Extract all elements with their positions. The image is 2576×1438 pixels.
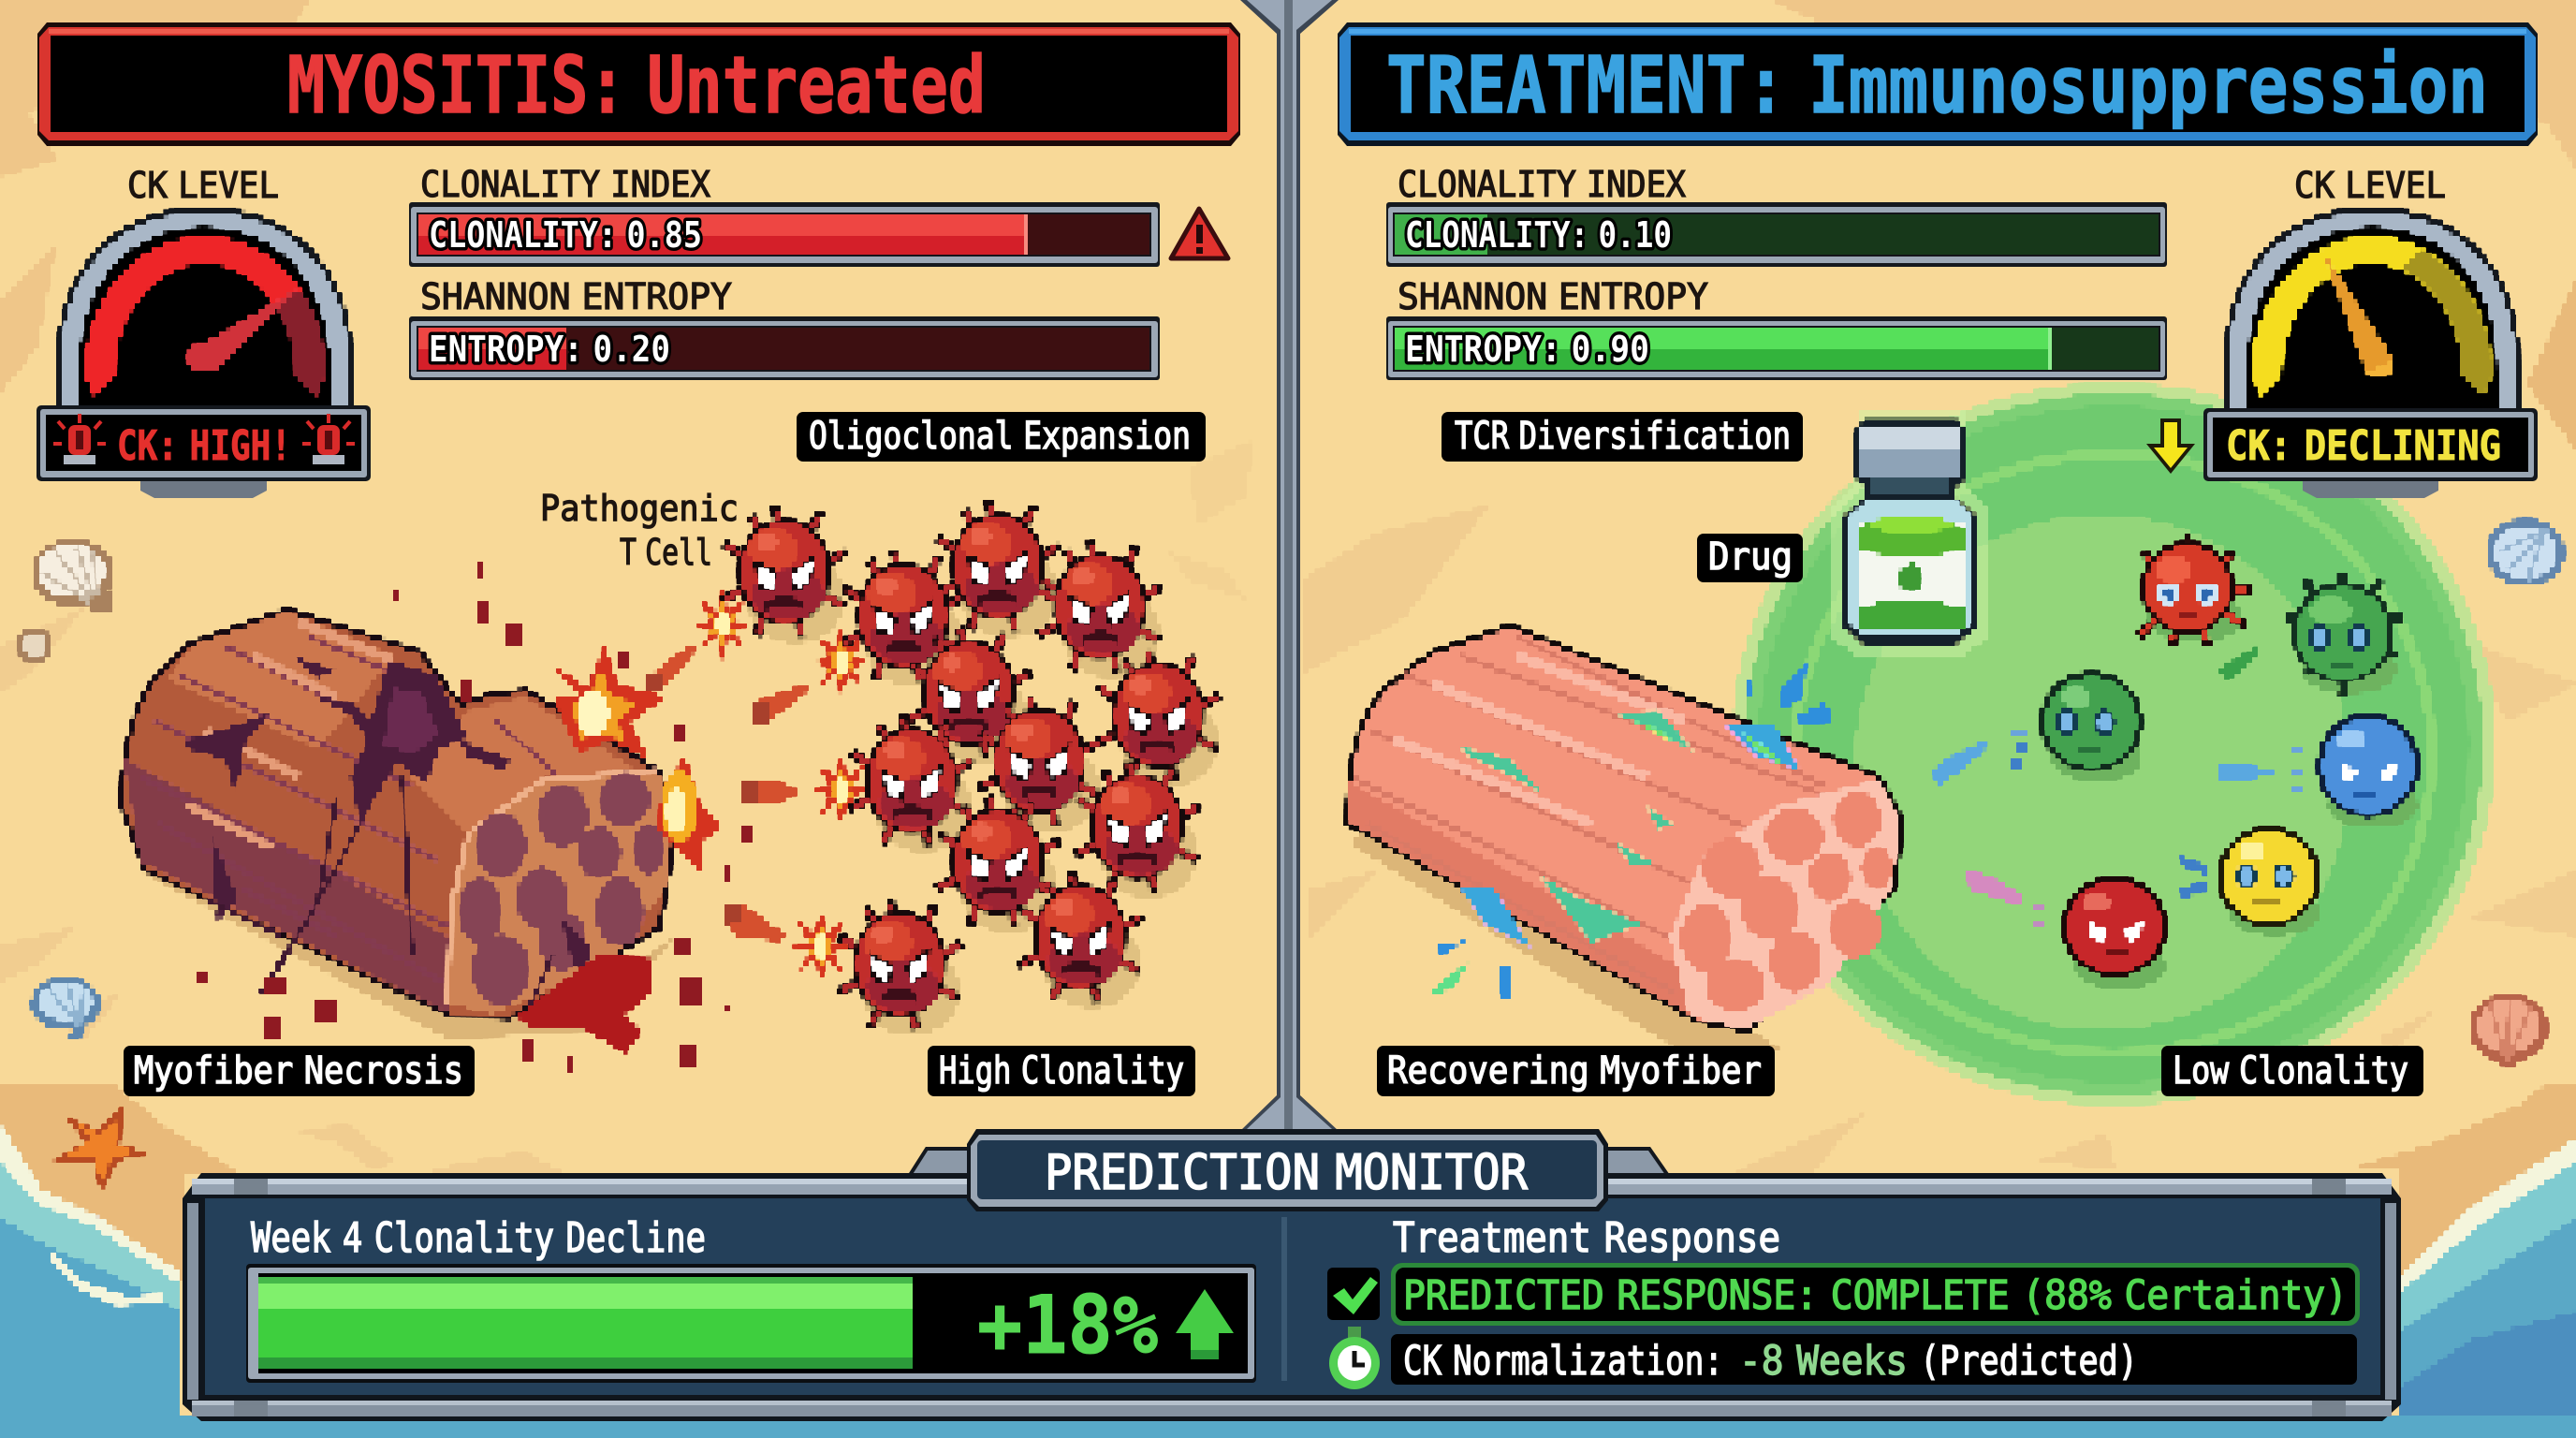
bar: clonality 0.85: CLONALITY: 0.85 (429, 214, 702, 256)
healing zone: green field (1732, 383, 2496, 1106)
diverse T cells and comets (1930, 534, 2420, 989)
icon: warning triangle (1171, 209, 1228, 258)
T cell: red spiky (2139, 534, 2251, 646)
icon: small pebble shell (17, 627, 52, 663)
icon: white shell top left (32, 539, 114, 612)
T cell 5 (1096, 650, 1220, 786)
shannon entropy heading: SHANNON ENTROPY (1398, 276, 1708, 317)
bar: entropy 0.90 (1386, 316, 2167, 380)
CK normalization row: -8 Weeks (1739, 1338, 1908, 1385)
clonality index heading: CLONALITY INDEX (1398, 164, 1686, 205)
T cell 3 (842, 550, 965, 687)
title banner: MYOSITIS Untreated (37, 22, 1240, 146)
label: high clonality: High Clonality (939, 1049, 1184, 1093)
icon: pink shell right (2469, 994, 2548, 1069)
predicted response row: PREDICTED RESPONSE: COMPLETE (88% Certainty) (1403, 1272, 2348, 1319)
CK normalization row (1391, 1334, 2357, 1385)
icon: green check (1327, 1268, 1380, 1320)
icon: orange starfish (51, 1107, 148, 1192)
T cell 12 (838, 899, 961, 1035)
header tab: prediction monitor (967, 1129, 1608, 1211)
bar: clonality 0.10: CLONALITY: 0.10 (1405, 214, 1672, 256)
CK declining status box: CK: DECLINING (2226, 422, 2501, 470)
T cell 2 (936, 501, 1060, 638)
T cell 6 (907, 627, 1031, 764)
label: drug: Drug (1708, 536, 1793, 579)
icon: left siren (53, 414, 106, 464)
bar: clonality decline (246, 1264, 1256, 1383)
label: oligoclonal expansion: Oligoclonal Expansion (809, 415, 1191, 458)
label: TCR diversification: TCR Diversification (1455, 415, 1791, 458)
header tab: prediction monitor: PREDICTION MONITOR (1045, 1145, 1529, 1201)
icon: drug vial (1831, 412, 1988, 657)
title banner: TREATMENT Immunosuppression (1338, 22, 2538, 146)
treatment response heading: Treatment Response (1393, 1214, 1780, 1262)
CK normalization row: (Predicted) (1920, 1338, 2138, 1385)
blood pool and debris (198, 560, 753, 1073)
CK high status box: CK: HIGH! (117, 422, 291, 470)
T cell cluster (723, 501, 1220, 1035)
bar: clonality 0.10 (1386, 202, 2167, 267)
T cell 9 (1076, 761, 1199, 898)
title banner: MYOSITIS Untreated: MYOSITIS: Untreated (287, 39, 986, 131)
clonality index heading: CLONALITY INDEX (420, 164, 710, 205)
panel: treatment (1338, 22, 2538, 1106)
gauge: CK declining (2224, 207, 2520, 412)
monitor frame (183, 1149, 2401, 1421)
CK level label: CK LEVEL (127, 165, 279, 206)
T cell 1 (723, 506, 846, 643)
T cell 4 (1038, 541, 1162, 678)
T cell: green spiky (2284, 573, 2401, 697)
T cell 10 (936, 796, 1060, 932)
CK declining status box (2203, 408, 2538, 498)
value: +18%: +18% (977, 1279, 1158, 1372)
center divider (1240, 0, 1339, 1131)
dotted divider (1281, 1217, 1287, 1381)
CK high status box (37, 405, 371, 498)
illustration: recovering myofiber (1350, 628, 1900, 1053)
icon: green up arrow (1176, 1289, 1234, 1359)
icon: right siren (302, 414, 355, 464)
label: myofiber necrosis: Myofiber Necrosis (134, 1049, 463, 1093)
comets and sparks (1930, 646, 2303, 928)
panel: prediction monitor (183, 1129, 2401, 1421)
label: pathogenic T cell: T Cell (620, 532, 712, 573)
icon: stopwatch (1329, 1327, 1380, 1389)
T cell: red round (2062, 876, 2167, 989)
T cell 11 (1018, 872, 1142, 1008)
T cell 7 (977, 696, 1101, 832)
T cell 8 (850, 715, 973, 852)
illustration: necrotic myofiber (124, 612, 674, 1039)
explosions and projectiles from T cells (554, 589, 870, 982)
label: pathogenic T cell: Pathogenic (540, 488, 739, 529)
T cell: green round (2040, 671, 2143, 781)
gauge: CK high (56, 207, 353, 412)
bar: entropy 0.20 (409, 316, 1160, 380)
T cell: yellow round (2217, 827, 2320, 935)
icon: blue shell right (2486, 517, 2565, 586)
label: low clonality: Low Clonality (2173, 1049, 2408, 1093)
icon: blue shell lower left (31, 977, 100, 1038)
week 4 clonality heading: Week 4 Clonality Decline (251, 1214, 706, 1262)
T cell: blue round (2317, 713, 2420, 828)
shannon entropy heading: SHANNON ENTROPY (420, 276, 732, 317)
panel: untreated myositis (37, 22, 1240, 1096)
bar: entropy 0.90: ENTROPY: 0.90 (1405, 329, 1649, 370)
CK level label: CK LEVEL (2294, 165, 2446, 206)
label: recovering myofiber: Recovering Myofiber (1387, 1049, 1762, 1093)
bar: clonality 0.85 (409, 202, 1160, 267)
bar: entropy 0.20: ENTROPY: 0.20 (429, 329, 670, 370)
CK normalization row: CK Normalization: (1403, 1338, 1723, 1385)
icon: yellow down arrow (2146, 418, 2195, 474)
label: pathogenic T cell (540, 488, 739, 573)
